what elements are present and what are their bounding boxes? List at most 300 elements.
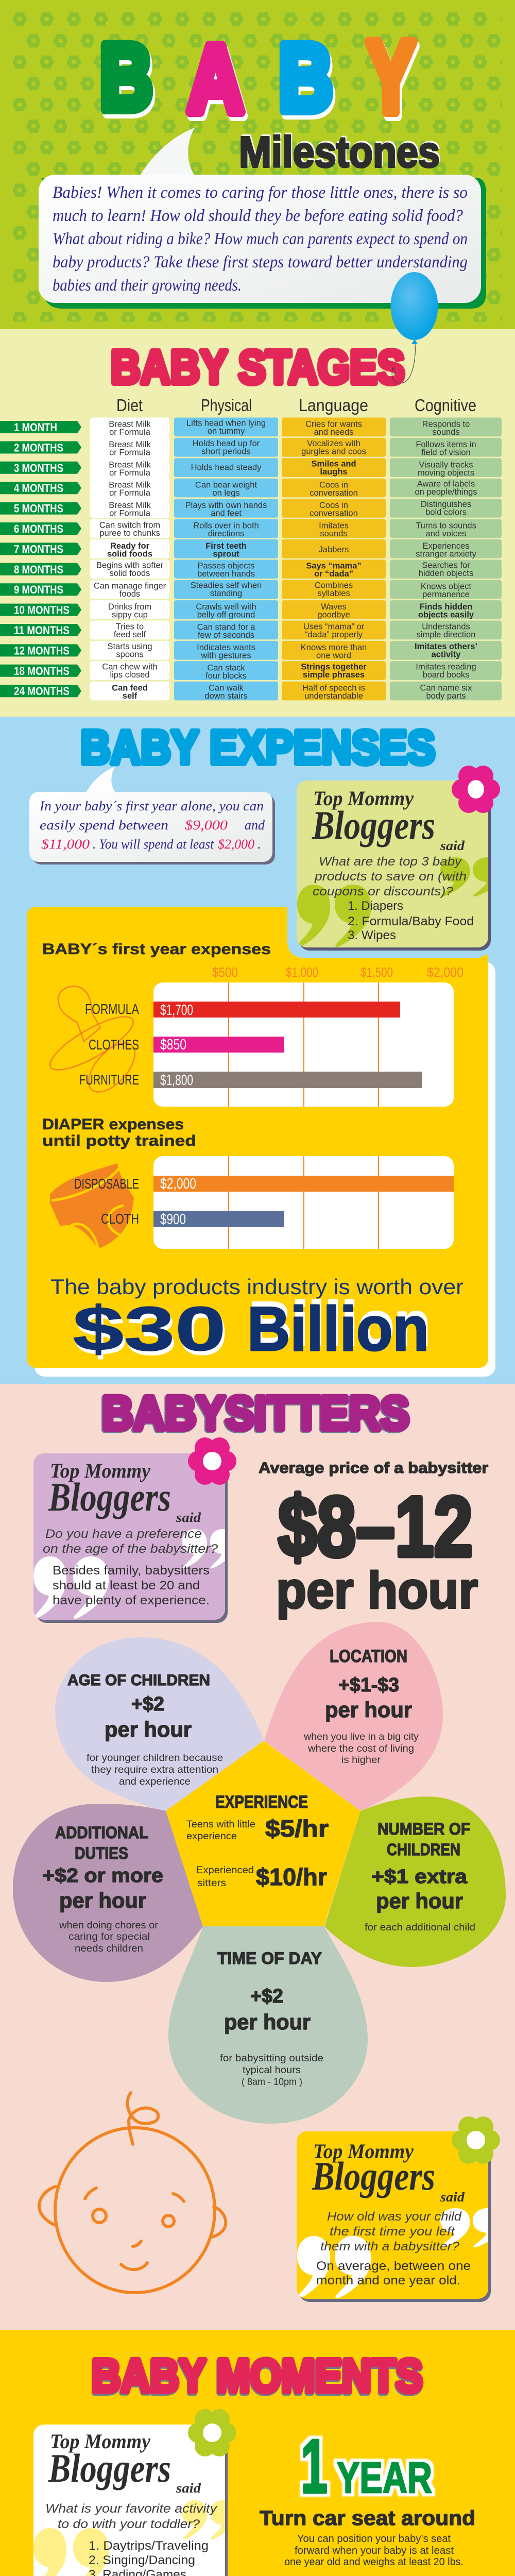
table row: 6 months	[0, 519, 502, 538]
moment: 1 year: one year old and weighs at least 20 lbs.	[284, 2556, 464, 2568]
center: experience: Teens with little	[186, 1819, 255, 1830]
bar chart: diaper expenses	[74, 1156, 454, 1249]
table row: 10 months	[0, 600, 502, 620]
diet cell: first five months merged	[90, 417, 169, 518]
big number: 30 billion: $30	[73, 1294, 226, 1364]
table row: 11 months: Can stand for a	[197, 622, 255, 632]
table row: 8 months: Begins with softer	[96, 561, 164, 570]
table row: 10 months: Finds hidden	[420, 602, 472, 612]
table row: 10 months: Drinks from	[108, 602, 151, 612]
heading: baby expenses: BABY EXPENSES	[80, 721, 435, 774]
petal: age of children	[55, 1637, 264, 1811]
title: Milestones: Milestones	[239, 128, 440, 176]
table row: 18 months: four blocks	[205, 671, 247, 681]
table row: 9 months: standing	[210, 589, 242, 598]
table row: 10 months: Crawls well with	[196, 602, 256, 612]
table row: 2 months: or Formula	[109, 448, 151, 457]
moment: 1 year: You can position your baby’s seat	[297, 2533, 451, 2545]
petal: time of day: +$2	[250, 1986, 283, 2007]
table row: 12 months: one word	[316, 651, 351, 660]
center: experience	[166, 1741, 360, 1926]
panel: baby stages	[0, 329, 515, 717]
callout: bloggers on babysitter age: Besides family, babysitters	[53, 1564, 210, 1578]
big number: 30 billion: Billion	[247, 1294, 429, 1364]
table row: 9 months: foods	[119, 589, 140, 599]
panel: baby expenses	[0, 717, 515, 1384]
table row: 8 months: or “dada”	[314, 569, 353, 579]
bar chart: first year expenses	[79, 982, 454, 1107]
table row: 2 months: gurgles and coos	[301, 447, 366, 456]
heading: baby moments: BABY MOMENTS	[92, 2350, 423, 2402]
table row: 24 months: self	[123, 691, 138, 701]
petal: time of day: typical hours	[243, 2065, 301, 2076]
petal: additional duties: per hour	[59, 1888, 146, 1912]
table row: 10 months: belly off ground	[197, 611, 255, 620]
speech bubble: first year spending	[29, 767, 275, 865]
table row: 9 months: Knows object	[421, 582, 471, 591]
table row: 4 months	[0, 479, 502, 498]
icon: pink flower	[452, 766, 500, 813]
callout: bloggers on activities	[33, 2409, 236, 2576]
callout: bloggers on babysitter age: said	[176, 1510, 201, 1525]
table row: 9 months: Steadies self when	[191, 581, 262, 590]
callout: bloggers on babysitter age: Top Mommy	[50, 1459, 150, 1482]
center: experience: EXPERIENCE	[215, 1792, 308, 1812]
table row: 4 months: Can bear weight	[195, 481, 257, 490]
table row: 11 months: feed self	[114, 630, 146, 639]
table row: 5 months	[0, 499, 502, 518]
callout: bloggers on activities: said	[176, 2481, 201, 2496]
heading: babysitters: BABYSITTERS	[102, 1387, 409, 1439]
icon: pacifier	[44, 986, 143, 1100]
chart title: diaper expenses: DIAPER expenses	[42, 1116, 184, 1133]
petal: location: +$1-$3	[338, 1674, 399, 1696]
table row: 18 months: board books	[423, 670, 469, 680]
speech bubble: first year spending: In your baby´s first year alone, you can	[39, 799, 264, 814]
table row: 5 months: Coos in	[319, 501, 348, 510]
table row: 12 months	[0, 641, 502, 660]
table row: 5 months: Breast Milk	[109, 501, 151, 510]
table row: 1 month: 1 MONTH	[14, 421, 57, 434]
table row: 2 months: Holds head up for	[193, 439, 260, 448]
speech bubble: intro	[39, 128, 486, 309]
table row: 6 months: and voices	[426, 529, 466, 538]
intro text: babies and their growing needs.	[53, 276, 242, 295]
icon: green flower	[188, 2409, 236, 2456]
table column headers	[116, 396, 476, 415]
moment: 1 year: 1	[301, 2424, 328, 2509]
moment: 1 year: forward when your baby is at least	[295, 2545, 454, 2556]
axis labels: $500	[212, 964, 238, 980]
big number: 30 billion	[73, 1294, 429, 1364]
speech bubble: first year spending: easily spend between	[40, 818, 168, 833]
axis labels: $2,000	[427, 964, 464, 980]
title: BABY: Y	[367, 20, 415, 133]
table row: 6 months: directions	[208, 529, 244, 538]
petal: location: LOCATION	[330, 1647, 407, 1666]
average price	[259, 1460, 488, 1619]
petal: additional duties: needs children	[75, 1943, 143, 1954]
table row: 1 month: Lifts head when lying	[186, 418, 266, 428]
callout: bloggers on leaving child: them with a babysitter?	[320, 2240, 460, 2253]
table row: 24 months: Can feed	[112, 684, 148, 693]
petal: number of children: CHILDREN	[387, 1840, 460, 1859]
callout: bloggers on leaving child: Top Mommy	[313, 2140, 414, 2163]
center: experience: $10/hr	[256, 1863, 327, 1890]
flower diagram: babysitter price factors	[13, 1622, 506, 2124]
petal: location: is higher	[341, 1755, 381, 1766]
table row: 11 months: simple direction	[417, 630, 475, 639]
moment: 1 year	[260, 2424, 475, 2568]
table row: 24 months: Can name six	[420, 684, 472, 693]
callout: bloggers on leaving child: month and one year old.	[316, 2274, 460, 2287]
petal: time of day: per hour	[224, 2010, 311, 2034]
chart title: diaper expenses: until potty trained	[42, 1132, 196, 1149]
average price: Average price of a babysitter	[259, 1460, 488, 1477]
callout: bloggers on saving: Top Mommy	[313, 787, 414, 810]
table row: 18 months: Can stack	[207, 663, 245, 672]
icon: pink flower	[188, 1437, 236, 1485]
callout: bloggers on babysitter age: should at least be 20 and	[53, 1579, 200, 1592]
table row: 5 months: and feet	[211, 509, 242, 518]
panel: baby moments	[0, 2330, 515, 2576]
table row: 8 months: Searches for	[422, 561, 470, 570]
petal: additional duties: +$2 or more	[42, 1865, 163, 1887]
table row: 7 months: solid foods	[107, 549, 152, 558]
petal: number of children: +$1 extra	[371, 1866, 468, 1888]
table row: 7 months: stranger anxiety	[416, 549, 476, 558]
table row: 10 months: 10 MONTHS	[14, 604, 70, 617]
table row: 18 months: 18 MONTHS	[14, 665, 70, 677]
table row: 3 months: 3 MONTHS	[14, 462, 63, 474]
table row: 6 months: 6 MONTHS	[14, 522, 63, 535]
petal: age of children: and experience	[119, 1776, 191, 1787]
table row: 12 months: Indicates wants	[197, 643, 255, 652]
callout: bloggers on saving: coupons or discounts)?	[313, 885, 454, 899]
table row: 3 months: or Formula	[109, 468, 151, 478]
chart title: diaper expenses	[42, 1116, 196, 1149]
table row: 8 months: Passes objects	[198, 561, 254, 570]
petal: additional duties: when doing chores or	[59, 1920, 159, 1931]
title: BABY	[100, 20, 415, 133]
table row: 24 months: 24 MONTHS	[14, 685, 70, 698]
table row: 2 months	[0, 438, 502, 457]
callout: bloggers on saving: What are the top 3 baby	[319, 855, 462, 869]
table row: 8 months: 8 MONTHS	[14, 563, 63, 576]
table row: 11 months	[0, 620, 502, 640]
speech bubble: first year spending: .	[258, 837, 261, 852]
quote marks	[33, 2500, 235, 2576]
moment: 1 year: Turn car seat around	[260, 2507, 475, 2530]
table row: 5 months: Distinguishes	[421, 500, 471, 509]
petal: age of children: for younger children because	[87, 1753, 223, 1764]
table row: 12 months: activity	[432, 650, 461, 659]
table row: 24 months: Half of speech is	[302, 684, 365, 693]
table row: 6 months: Rolls over in both	[193, 521, 259, 531]
table row: 2 months: field of vision	[421, 448, 471, 457]
table column headers: Physical	[201, 396, 252, 415]
heading: baby stages: BABY STAGES	[111, 341, 405, 394]
petal: additional duties	[13, 1804, 203, 1982]
petal: additional duties: DUTIES	[75, 1844, 128, 1862]
industry worth text: The baby products industry is worth over	[50, 1275, 464, 1299]
table row: 1 month: and needs	[314, 428, 354, 437]
table row: 8 months	[0, 560, 502, 579]
petal: number of children	[324, 1797, 506, 1967]
table column headers: Language	[299, 396, 368, 415]
bar chart: first year expenses: FORMULA	[85, 1001, 139, 1017]
table row: 8 months: Says “mama”	[306, 561, 362, 570]
intro text: What about riding a bike? How much can parents expect to spend on	[53, 230, 468, 248]
table row: 11 months: Uses “mama” or	[303, 622, 365, 632]
callout: bloggers on leaving child: Bloggers	[312, 2154, 435, 2198]
petal: location: where the cost of living	[307, 1743, 414, 1754]
table row: 10 months: objects easily	[418, 611, 474, 620]
petal: age of children: +$2	[131, 1693, 164, 1715]
bar chart: first year expenses: $1,800	[160, 1072, 193, 1089]
table row: 4 months: Aware of labels	[417, 480, 475, 489]
intro text	[53, 183, 468, 295]
table row: 9 months: syllables	[317, 589, 350, 598]
table row: 4 months: on legs	[212, 488, 240, 498]
table row: 2 months: 2 MONTHS	[14, 441, 63, 454]
table column headers: Diet	[116, 396, 143, 415]
table row: 8 months: solid foods	[110, 569, 150, 578]
speech bubble: first year spending: . You will spend at least	[93, 837, 214, 852]
table row: 10 months: goodbye	[317, 611, 350, 620]
callout: bloggers on babysitter age: Bloggers	[48, 1475, 171, 1519]
speech bubble: first year spending: and	[245, 818, 265, 833]
quote marks	[33, 1529, 235, 1619]
table row: 1 month: on tummy	[208, 427, 245, 436]
petal: time of day: for babysitting outside	[220, 2053, 323, 2064]
table row: 3 months: Smiles and	[311, 459, 356, 468]
title: BABY: B	[279, 24, 333, 130]
icon: baby face	[39, 2093, 226, 2293]
quote marks	[297, 857, 503, 947]
table row: 12 months: with gestures	[200, 651, 251, 660]
bar chart: first year expenses: $850	[160, 1037, 186, 1053]
table row: 2 months: Vocalizes with	[307, 439, 360, 448]
callout: bloggers on activities: What is your favorite activity	[45, 2502, 218, 2516]
table row: 4 months: conversation	[310, 488, 358, 498]
table row: 7 months: sprout	[213, 549, 239, 558]
moment: 1 year: YEAR	[337, 2453, 432, 2502]
table row: 11 months: Tries to	[116, 622, 144, 632]
table row: 6 months: Imitates	[319, 521, 349, 531]
petal: time of day: TIME OF DAY	[217, 1949, 322, 1968]
average price: per hour	[276, 1562, 478, 1619]
table row: 5 months: or Formula	[109, 509, 151, 518]
bar chart: first year expenses: CLOTHES	[89, 1037, 139, 1053]
callout: bloggers on saving: products to save on (with	[314, 870, 467, 884]
bar chart: diaper expenses: $900	[160, 1211, 186, 1228]
quote marks	[297, 2208, 503, 2298]
table row: 4 months: Breast Milk	[109, 481, 151, 490]
callout: bloggers on babysitter age: Do you have a preference	[45, 1527, 202, 1541]
table row: 18 months: simple phrases	[303, 670, 365, 680]
petal: age of children: they require extra attention	[91, 1765, 218, 1775]
table row: 18 months	[0, 661, 502, 681]
petal: additional duties: caring for special	[68, 1931, 150, 1942]
table row: 4 months: Coos in	[319, 481, 348, 490]
table row: 7 months: First teeth	[205, 541, 247, 551]
center: experience: Experienced	[196, 1865, 254, 1876]
table row: 12 months: Knows more than	[301, 643, 367, 652]
table row: 4 months: or Formula	[109, 488, 151, 498]
bar chart: first year expenses: $1,700	[160, 1002, 193, 1019]
table row: 5 months: Plays with own hands	[185, 501, 267, 510]
table row: 24 months: understandable	[304, 691, 363, 701]
center: experience: $5/hr	[265, 1815, 329, 1842]
table row: 24 months: body parts	[426, 691, 466, 701]
icon: green flower	[452, 2116, 500, 2164]
table row: 1 month: sounds	[432, 428, 460, 437]
table row: 12 months: 12 MONTHS	[14, 644, 70, 657]
table row: 2 months: Follows items in	[416, 440, 476, 449]
axis labels	[212, 964, 464, 980]
bar chart: diaper expenses: DISPOSABLE	[74, 1176, 139, 1192]
petal: location: when you live in a big city	[303, 1732, 419, 1742]
table row: 12 months: spoons	[116, 650, 144, 659]
table row: 1 month: Responds to	[422, 419, 470, 429]
table row: 6 months: sounds	[320, 529, 348, 538]
average price: $8–12	[278, 1479, 473, 1574]
table row: 18 months: Can chew with	[102, 662, 158, 671]
title: BABY: B	[100, 25, 152, 129]
table row: 6 months: Turns to sounds	[416, 521, 476, 531]
table row: 4 months: on people/things	[415, 487, 477, 497]
table row: 9 months: permanence	[422, 590, 470, 599]
petal: location: per hour	[325, 1698, 412, 1722]
petal: age of children: per hour	[105, 1717, 192, 1741]
callout: bloggers on leaving child: How old was your child	[327, 2210, 462, 2224]
table row: 24 months: Can walk	[209, 684, 244, 693]
table row: 8 months: hidden objects	[419, 569, 473, 578]
petal: number of children: NUMBER OF	[377, 1820, 470, 1838]
petal: additional duties: ADDITIONAL	[55, 1823, 148, 1842]
table row: 3 months: Breast Milk	[109, 460, 151, 469]
callout: bloggers on activities: 1. Daytrips/Traveling	[89, 2539, 209, 2553]
intro text: Babies! When it comes to caring for those little ones, there is so	[53, 183, 468, 202]
petal: number of children: for each additional child	[365, 1922, 475, 1933]
petal: location	[264, 1622, 443, 1811]
table row: 24 months: down stairs	[204, 691, 248, 701]
title: BABY: A	[187, 26, 244, 132]
table row: 2 months: short periods	[201, 447, 251, 456]
callout: bloggers on leaving child: the first time you left	[330, 2225, 456, 2239]
intro text: baby products? Take these first steps toward better understanding	[53, 253, 468, 272]
callout: bloggers on leaving child	[297, 2116, 503, 2302]
table row: 1 month: Cries for wants	[305, 419, 362, 429]
callout: bloggers on saving: 1. Diapers	[348, 899, 403, 913]
callout: bloggers on activities: 2. Singing/Dancing	[89, 2553, 195, 2567]
callout: bloggers on saving: 3. Wipes	[348, 928, 396, 942]
table row: 18 months: lips closed	[110, 670, 150, 680]
table row: 11 months: few of seconds	[198, 631, 254, 640]
table row: 3 months: Holds head steady	[191, 463, 262, 472]
callout: bloggers on babysitter age: have plenty of experience.	[53, 1594, 210, 1607]
callout: bloggers on leaving child: On average, between one	[316, 2259, 471, 2273]
table row: 9 months: 9 MONTHS	[14, 583, 63, 596]
callout: bloggers on saving: 2. Formula/Baby Food	[348, 914, 474, 928]
table row: 6 months: puree to chunks	[99, 529, 160, 538]
callout: bloggers on babysitter age: on the age of the babysitter?	[43, 1542, 218, 1556]
speech bubble: first year spending: $9,000	[185, 818, 228, 833]
table row: 9 months	[0, 580, 502, 599]
table row: 2 months: Breast Milk	[109, 440, 151, 449]
table row: 3 months: laughs	[320, 467, 348, 477]
chart title: first year expenses: BABY´s first year expenses	[42, 941, 271, 958]
intro text: much to learn! How old should they be before eating solid food?	[53, 207, 463, 225]
petal: time of day: ( 8am - 10pm )	[242, 2077, 302, 2088]
petal: number of children: per hour	[376, 1889, 463, 1913]
table row: 7 months: Jabbers	[319, 545, 349, 554]
table row: 7 months: 7 MONTHS	[14, 543, 63, 555]
speech bubble: first year spending: $2,000	[218, 837, 254, 852]
table row: 3 months: moving objects	[418, 468, 474, 478]
icon: diaper	[50, 1163, 134, 1249]
table row: 5 months: bold colors	[425, 508, 467, 517]
table row: 10 months: sippy cup	[112, 611, 148, 620]
table row: 11 months: 11 MONTHS	[14, 624, 70, 637]
table row: 3 months: Visually tracks	[419, 460, 473, 469]
center: experience: sitters	[197, 1878, 226, 1889]
table row: 18 months: Imitates reading	[416, 662, 476, 671]
center: experience: experience	[186, 1831, 237, 1842]
callout: bloggers on saving: said	[440, 838, 465, 853]
table row: 7 months: Ready for	[110, 541, 150, 551]
table row: 24 months	[0, 682, 502, 701]
table row: 1 month: or Formula	[109, 428, 151, 437]
table row: 1 month	[0, 417, 502, 437]
axis labels: $1,500	[360, 964, 393, 980]
axis labels: $1,000	[286, 964, 318, 980]
table row: 11 months: Understands	[422, 622, 470, 632]
table row: 5 months: conversation	[310, 509, 358, 518]
callout: bloggers on activities: Top Mommy	[50, 2430, 150, 2453]
table row: 10 months: Waves	[321, 602, 347, 612]
table row: 8 months: between hands	[197, 569, 255, 579]
table row: 7 months	[0, 539, 502, 558]
table row: 12 months: Imitates others’	[415, 642, 477, 651]
callout: bloggers on activities: to do with your toddler?	[58, 2517, 200, 2531]
callout: bloggers on leaving child: said	[440, 2190, 465, 2205]
table row: 5 months: 5 MONTHS	[14, 502, 63, 515]
bar chart: diaper expenses: $2,000	[160, 1176, 196, 1192]
table column headers: Cognitive	[415, 396, 476, 415]
callout: bloggers on babysitter age	[33, 1437, 236, 1623]
table row: 18 months: Strings together	[301, 662, 367, 671]
callout: bloggers on activities: Bloggers	[48, 2446, 171, 2490]
table row: 9 months: Can manage finger	[94, 582, 166, 591]
table row: 7 months: Experiences	[423, 541, 469, 551]
petal: time of day	[168, 1926, 368, 2124]
table row: 3 months	[0, 458, 502, 478]
callout: bloggers on saving: Bloggers	[312, 803, 435, 848]
speech bubble: first year spending: $11,000	[41, 837, 90, 852]
table row: 1 month: Breast Milk	[109, 419, 151, 429]
panel: babysitters	[0, 1384, 515, 2330]
bar chart: first year expenses: FURNITURE	[79, 1072, 139, 1088]
panel: expense charts	[27, 907, 495, 1377]
petal: age of children: AGE OF CHILDREN	[67, 1672, 210, 1689]
icon: balloon	[390, 272, 438, 383]
table row: 6 months: Can switch from	[99, 520, 160, 530]
callout: bloggers on saving	[297, 766, 503, 951]
table row: 12 months: Starts using	[107, 642, 152, 651]
bar chart: diaper expenses: CLOTH	[101, 1211, 139, 1227]
